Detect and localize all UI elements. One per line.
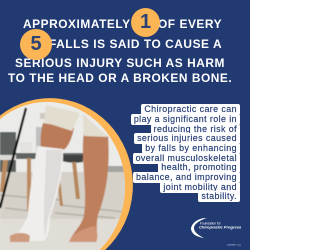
shorts [44, 105, 80, 131]
text block: chiropractic care: reducing the risk of [154, 124, 237, 134]
text block: chiropractic care: balance, and improving [136, 172, 237, 182]
text block: chiropractic care: health, promoting [161, 162, 237, 172]
text block: chiropractic care: serious injuries caused [137, 133, 237, 143]
number badge: 1 [131, 8, 160, 37]
headline: TO THE HEAD OR A BROKEN BONE. [8, 71, 232, 85]
headline: OF EVERY [158, 17, 222, 31]
text block: chiropractic care: joint mobility and [163, 182, 237, 192]
left thigh [41, 123, 74, 150]
crutch [0, 108, 26, 208]
text block: chiropractic care [131, 104, 240, 202]
text block: chiropractic care: overall musculoskeletal [136, 152, 237, 162]
text block: chiropractic care: stability. [201, 191, 237, 201]
cast [12, 146, 63, 241]
rug and floor [0, 172, 130, 220]
text block: chiropractic care: Chiropractic care can [144, 104, 237, 114]
logo: Foundation for Chiropractic Progress: Chiropractic Progress [199, 226, 241, 230]
logo: Foundation for Chiropractic Progress [191, 218, 242, 238]
headline [8, 17, 232, 85]
photo circle: leg in cast [0, 98, 133, 250]
text block: chiropractic care: by falls by enhancing [145, 143, 237, 153]
logo: Foundation for Chiropractic Progress: Foundation for [200, 221, 221, 225]
headline: FALLS IS SAID TO CAUSE A [49, 37, 222, 51]
text block: chiropractic care: play a significant role in [134, 114, 237, 124]
table and chairs [0, 132, 16, 172]
number badge: 5: 5 [30, 33, 42, 55]
number badge: 1: 1 [140, 11, 151, 33]
number badge: 5 [20, 29, 52, 60]
headline: APPROXIMATELY [23, 17, 131, 31]
headline: SERIOUS INJURY SUCH AS HARM [15, 56, 225, 70]
right leg [70, 132, 109, 241]
